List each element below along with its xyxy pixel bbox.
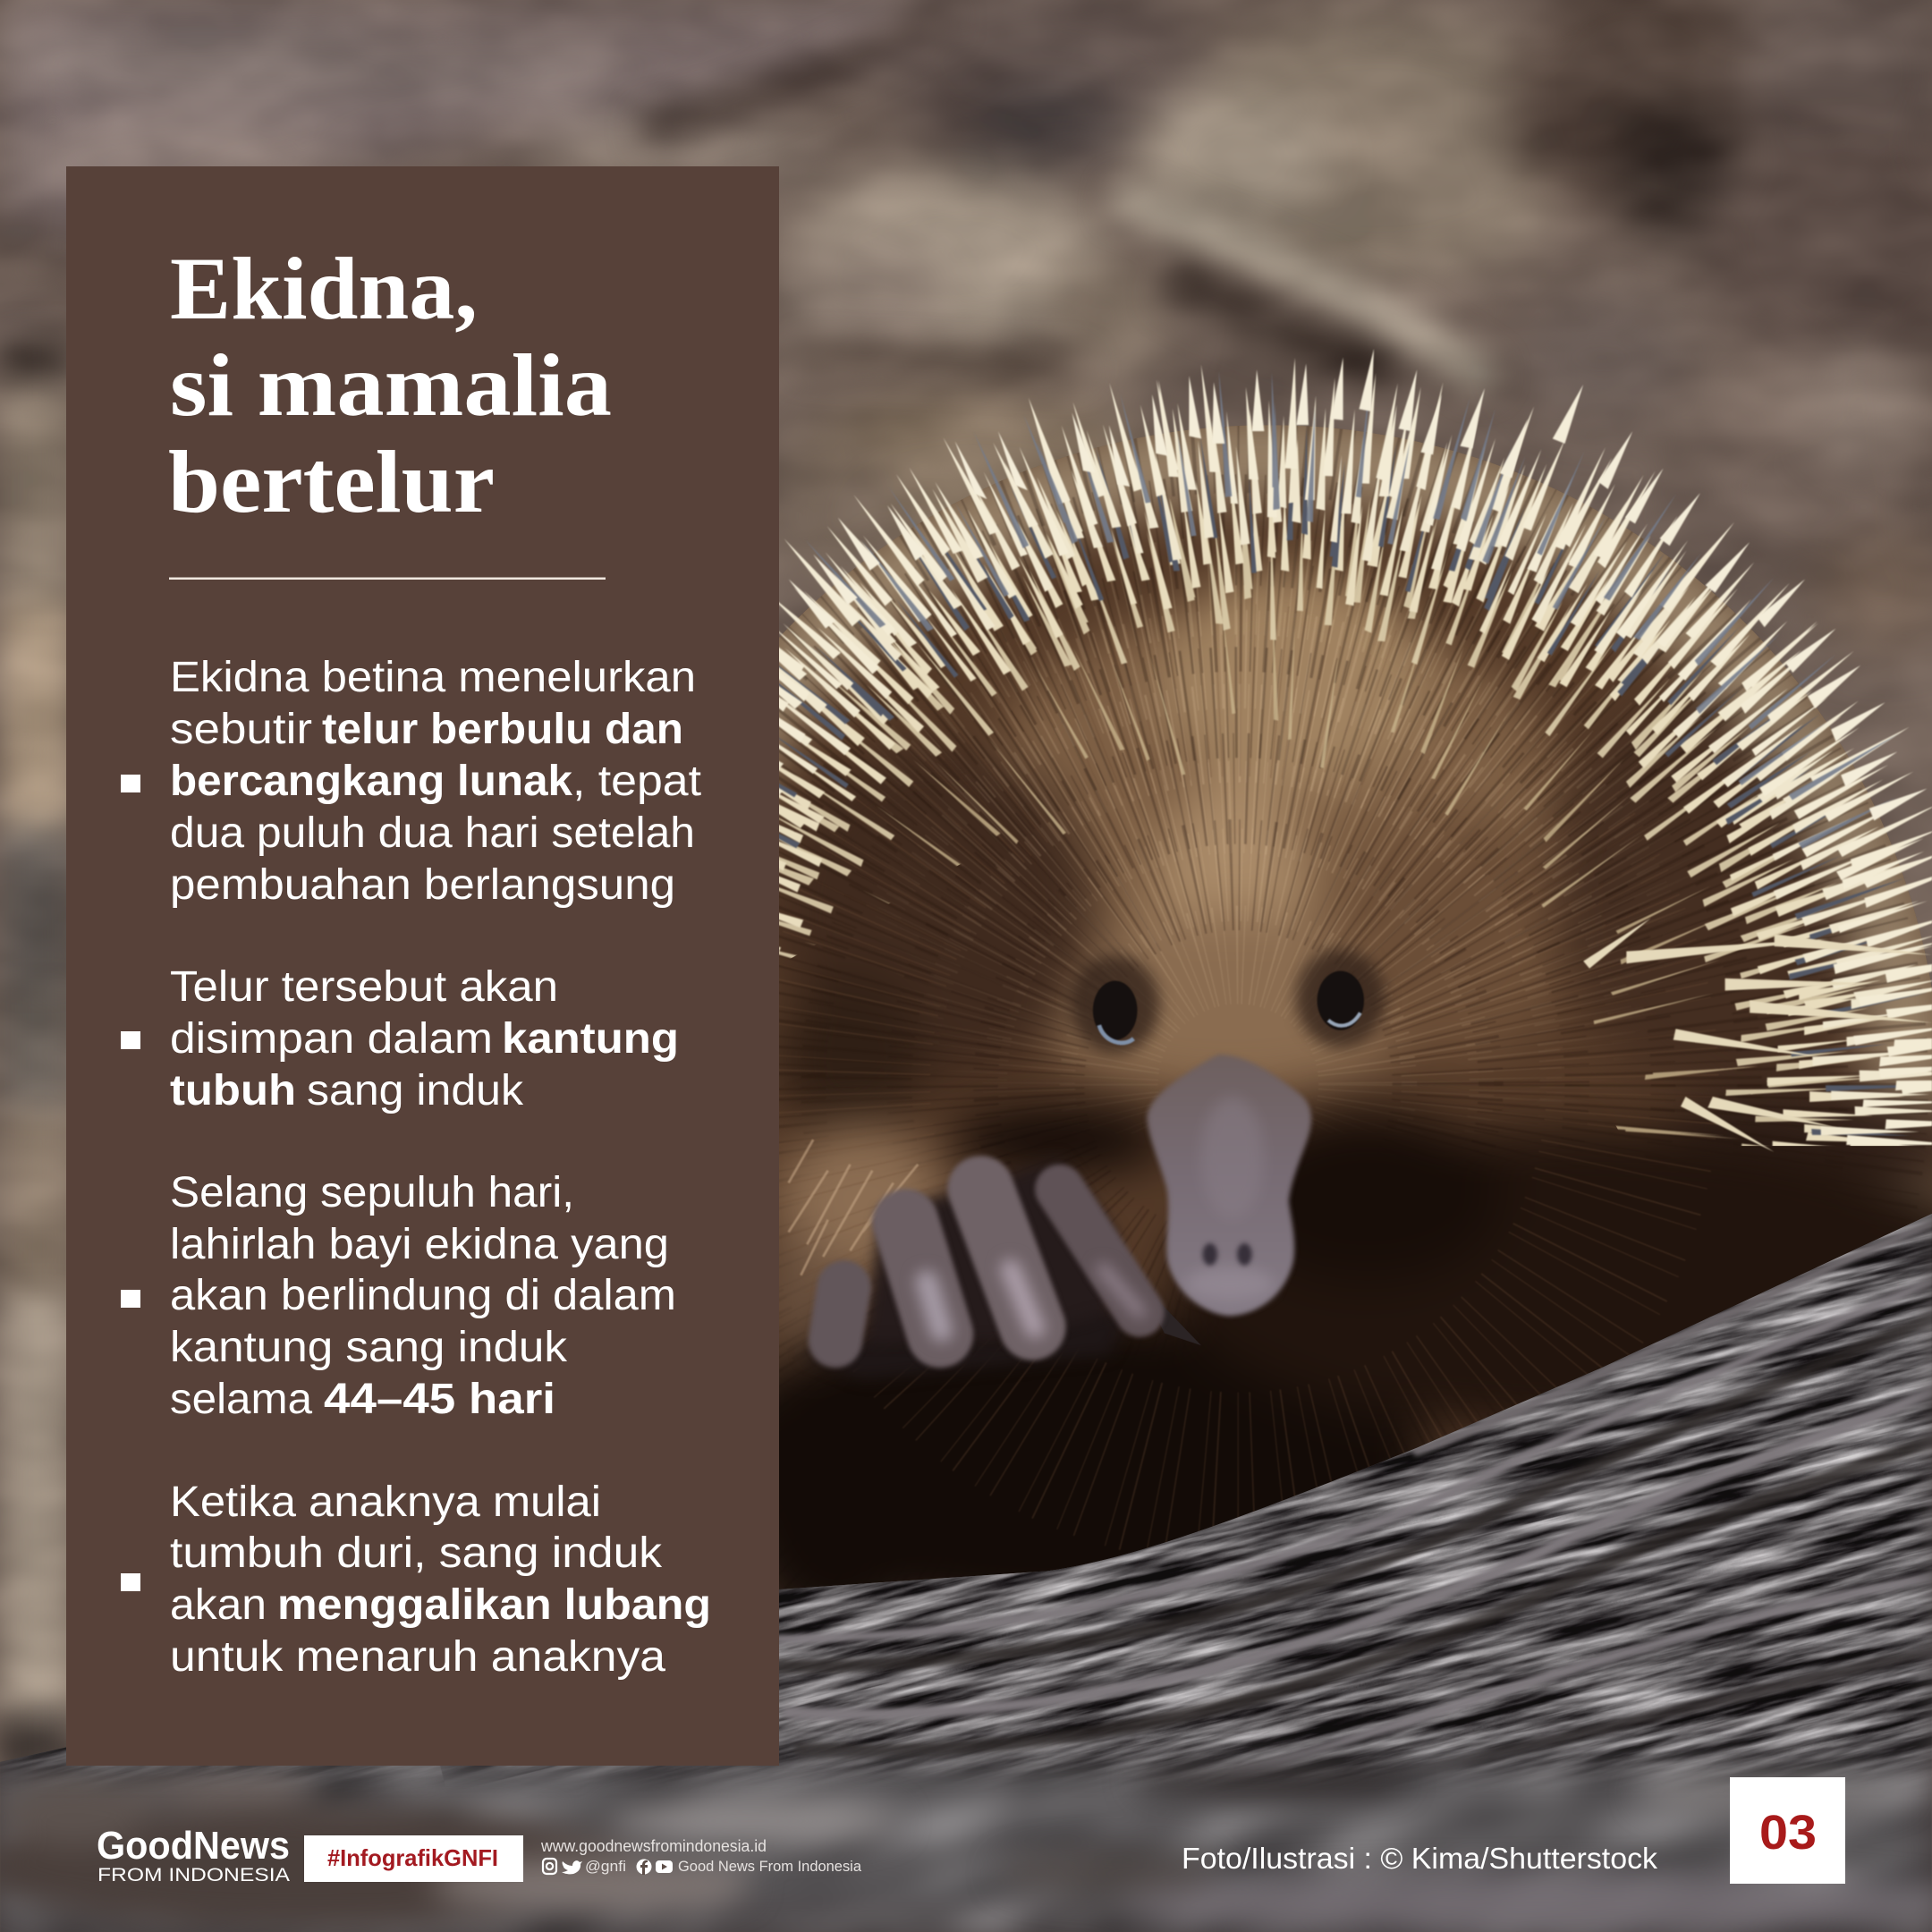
arm fur strands bbox=[789, 1140, 918, 1275]
paragraph 4 bbox=[121, 1479, 711, 1681]
website and social handles bbox=[540, 1837, 862, 1875]
paragraph 3: lahirlah bayi ekidna yang bbox=[170, 1221, 669, 1268]
paragraph 3: selama bbox=[170, 1376, 312, 1423]
dark underside and arm fur bbox=[779, 1076, 1932, 1589]
paragraph 4: tumbuh duri, sang induk bbox=[170, 1530, 663, 1577]
long lower-right quills bbox=[1583, 918, 1932, 1152]
title: Ekidna, bbox=[170, 239, 478, 338]
eye: left bbox=[1093, 981, 1137, 1043]
page number badge: 03 bbox=[1759, 1806, 1817, 1860]
panel: text card bbox=[66, 166, 779, 1766]
logo: GoodNews From Indonesia: GoodNews bbox=[97, 1824, 290, 1868]
photo credit: Foto/Ilustrasi : © Kima/Shutterstock bbox=[1182, 1842, 1658, 1875]
paragraph 4: menggalikan lubang bbox=[277, 1581, 711, 1629]
paragraph 2: kantung bbox=[502, 1015, 679, 1063]
hashtag badge: #InfografikGNFI bbox=[327, 1844, 498, 1871]
page number badge bbox=[1730, 1777, 1845, 1884]
paragraph 1: bercangkang lunak bbox=[170, 758, 572, 805]
sharp bark texture bbox=[0, 1171, 1932, 1932]
paragraph 2 bbox=[121, 963, 679, 1114]
website and social handles: Good News From Indonesia bbox=[678, 1858, 862, 1875]
paragraph 3: akan berlindung di dalam bbox=[170, 1272, 676, 1319]
bullet 4 bbox=[121, 1573, 140, 1591]
paragraph 3 bbox=[121, 1169, 676, 1423]
snout bbox=[1147, 1055, 1311, 1316]
paragraph 1: dua puluh dua hari setelah bbox=[170, 809, 695, 857]
bullet 1 bbox=[121, 775, 140, 792]
paragraph 4: akan bbox=[170, 1581, 267, 1629]
paragraph 3: kantung sang induk bbox=[170, 1324, 568, 1371]
background log and rock edges bbox=[0, 13, 1491, 1775]
paragraph 2: tubuh bbox=[170, 1067, 296, 1114]
hashtag badge bbox=[304, 1835, 523, 1882]
fine radial fur bbox=[779, 426, 1928, 1301]
quill tips on the silhouette bbox=[789, 349, 1927, 820]
echidna body bbox=[779, 349, 1932, 1589]
bark log in the foreground bbox=[0, 1171, 1932, 1932]
paragraph 1: , tepat bbox=[572, 758, 701, 805]
logo: GoodNews From Indonesia bbox=[97, 1824, 290, 1885]
paragraph 2: sang induk bbox=[307, 1067, 524, 1114]
fur colour masses bbox=[779, 426, 1932, 1589]
eye: right bbox=[1318, 971, 1364, 1030]
panel background bbox=[66, 166, 779, 1766]
bullet 3 bbox=[121, 1290, 140, 1308]
paragraph 4: Ketika anaknya mulai bbox=[170, 1479, 601, 1526]
logo: GoodNews From Indonesia: FROM INDONESIA bbox=[97, 1865, 290, 1885]
icon: instagram bbox=[543, 1859, 556, 1874]
title bbox=[168, 239, 612, 531]
paragraph 2: disimpan dalam bbox=[170, 1015, 493, 1063]
icon: facebook bbox=[637, 1859, 651, 1875]
paragraph 1 bbox=[121, 654, 701, 909]
paragraph 1: Ekidna betina menelurkan bbox=[170, 654, 696, 701]
website and social handles: www.goodnewsfromindonesia.id bbox=[540, 1837, 767, 1855]
title: si mamalia bbox=[170, 335, 612, 435]
paragraph 1: sebutir bbox=[170, 706, 312, 753]
paragraph 1: pembuahan berlangsung bbox=[170, 861, 675, 909]
echidna face bbox=[801, 949, 1385, 1380]
blurred near-bark layer bbox=[0, 1171, 1932, 1932]
icon: twitter bbox=[562, 1860, 582, 1874]
paragraph 3: Selang sepuluh hari, bbox=[170, 1169, 574, 1216]
front paw with claws bbox=[801, 1158, 1201, 1380]
website and social handles: @gnfi bbox=[585, 1858, 626, 1875]
blurred rocks backdrop bbox=[0, 0, 1932, 653]
faint strands on dark underside bbox=[844, 690, 1632, 1479]
bullet 2 bbox=[121, 1031, 140, 1049]
paragraph 3: 44–45 hari bbox=[324, 1376, 555, 1423]
eye shadows bbox=[1071, 949, 1385, 1054]
paragraph 2: Telur tersebut akan bbox=[170, 963, 558, 1011]
paragraph 1: telur berbulu dan bbox=[322, 706, 683, 753]
title: bertelur bbox=[168, 432, 495, 531]
icon: youtube bbox=[656, 1860, 673, 1873]
paragraph 4: untuk menaruh anaknya bbox=[170, 1633, 665, 1681]
quills bbox=[571, 353, 1932, 1367]
